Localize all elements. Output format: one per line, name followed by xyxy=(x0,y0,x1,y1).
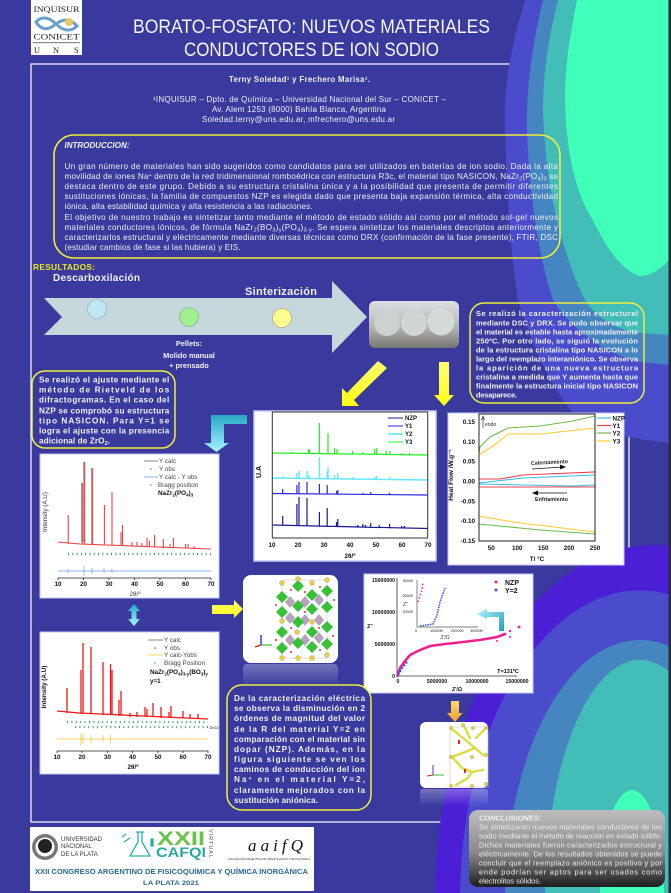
logo: flask xyxy=(122,832,153,856)
panel: introduccion: + xyxy=(149,173,152,179)
curve: Y3 xyxy=(272,423,428,455)
difference curve xyxy=(57,733,208,745)
legend: Y calc-Yobs xyxy=(164,652,197,659)
logo: INQUISUR CONICET UNS: CONICET xyxy=(34,32,80,42)
legend: Y1 xyxy=(612,423,621,430)
panel: introduccion: sustituciones iónicas, la familia de compuestos NZP es elegida dado que presenta baja expansión térmica, alta conductividad xyxy=(64,192,558,201)
axis labels: 2θ/º xyxy=(345,553,356,560)
panel: introduccion: Un gran número de materiales han sido sugeridos como candidatos para ser utilizados en baterías de ion sodio. Dada la alta xyxy=(64,162,558,171)
logo: XXII CAFQI: VIRTUAL xyxy=(207,829,213,858)
legend: Bragg Position xyxy=(164,660,205,667)
panel: introduccion: ) xyxy=(300,223,303,232)
panel: introduccion: movilidad de iones Na xyxy=(64,172,148,181)
text box: rietveld: Se realizó el ajuste mediante el xyxy=(39,376,169,384)
panel: introduccion: destaca dentro de este grupo. Debido a su estructura cristalina única y a la posibilidad que presenta de permitir diferentes xyxy=(64,182,558,191)
logo: XXII CAFQI: CAFQI xyxy=(156,844,206,860)
decorative ellipses bottom right xyxy=(435,545,671,893)
panel: introduccion: 4 xyxy=(297,228,300,234)
text box: electrica: se observa la disminución en 2 xyxy=(234,704,365,713)
axis labels: 60 xyxy=(398,542,406,549)
text box: rietveld: NZP se comprobó su estructura xyxy=(39,406,170,416)
label: descarboxilacion: Descarboxilación xyxy=(53,273,140,284)
text box: electrica: Na xyxy=(234,775,246,784)
text box: dsc drx: la aparición de una nueva estructura xyxy=(476,364,639,372)
axis labels: 50 xyxy=(156,581,164,588)
legend: Y1 xyxy=(405,424,413,430)
legend: y=1 xyxy=(150,678,161,685)
panel: introduccion: caracterizarlos estructural y eléctricamente mediante diversas técnicas como DRX (confirmación de la fase presente), FTIR, DSC xyxy=(64,233,558,242)
NZP main curve xyxy=(398,634,505,676)
arrow: cyan double vertical xyxy=(128,604,140,626)
inset chart: 200000 xyxy=(451,629,464,633)
arrow: yellow diagonal xyxy=(342,361,387,406)
arrow: cyan elbow xyxy=(204,415,247,452)
legend: 3-y xyxy=(183,672,190,676)
x axis labels: 10000000 xyxy=(465,679,489,685)
chart: rietveld NZP xyxy=(40,454,219,598)
legend xyxy=(494,580,519,675)
inset chart: 100000 xyxy=(430,629,443,633)
axis labels: U.A xyxy=(256,466,263,478)
x axis labels xyxy=(367,624,529,693)
footer logos panel xyxy=(30,827,314,891)
y axis labels: 15000000 xyxy=(372,578,395,584)
x tick labels: T/ °C xyxy=(530,555,545,563)
x axis labels: 15000000 xyxy=(505,679,529,685)
affiliation xyxy=(153,95,447,124)
y tick labels: 0.10 xyxy=(463,439,475,446)
text box: electrica xyxy=(227,685,371,810)
legend: Y obs xyxy=(164,645,180,652)
y tick labels: -0.10 xyxy=(461,518,475,525)
text box: dsc drx: largo del reemplazo interaniónico. Se observa xyxy=(476,354,639,364)
legend: 3 xyxy=(201,672,204,676)
heading: resultados: RESULTADOS: xyxy=(33,262,95,272)
curve: Y1 xyxy=(272,482,428,495)
annotations: endo xyxy=(485,422,496,428)
legend: Bragg position xyxy=(158,482,199,489)
x tick labels: 150 xyxy=(538,545,549,552)
panel: introduccion: 4 xyxy=(537,176,540,182)
x tick labels: 200 xyxy=(564,545,575,552)
y tick labels: 0.15 xyxy=(463,419,475,426)
x tick labels: 50 xyxy=(488,545,495,552)
crystal structure 2 xyxy=(420,722,488,806)
inset chart: Z'' xyxy=(403,602,408,608)
panel: introduccion: (PO xyxy=(282,223,297,232)
axis labels: 10 xyxy=(54,581,62,588)
chart: rietveld y=1 xyxy=(40,632,219,774)
panel: conclusiones: concluir que el reemplazo aniónico es positivo y por xyxy=(479,858,663,868)
legend: ) xyxy=(203,669,205,676)
title xyxy=(133,17,490,61)
legend: NaZr xyxy=(158,490,172,497)
curve: Y2 xyxy=(272,457,428,480)
panel: introduccion: 2 xyxy=(519,176,522,182)
annotations xyxy=(482,416,569,503)
x tick labels: 100 xyxy=(512,545,523,552)
legend: Y2 xyxy=(405,432,413,438)
curves: Y2 xyxy=(479,416,595,534)
text box: dsc drx: Se realizó la caracterización estructural xyxy=(476,309,638,318)
legend xyxy=(597,416,625,446)
label: pellets: + prensado xyxy=(169,361,209,370)
x tick labels: 250 xyxy=(590,545,601,552)
legend: 2 xyxy=(172,492,175,498)
text box: dsc drx: de la estructura cristalina tipo NASICON a lo xyxy=(476,346,638,354)
legend: 4 xyxy=(186,492,189,498)
axis labels: 10 xyxy=(53,754,61,761)
text: congress name: LA PLATA 2021 xyxy=(143,880,199,887)
chart: xrd patterns xyxy=(254,411,436,561)
legend: ) xyxy=(181,669,183,676)
inset chart: 300000 xyxy=(470,629,483,633)
chart: heat flow xyxy=(448,413,625,565)
axis labels: 20 xyxy=(80,581,87,588)
text box: electrica: claramente mejorados con la xyxy=(234,786,365,795)
x axis labels: Z'/Ω xyxy=(452,687,462,693)
arrow: yellow right xyxy=(212,600,243,618)
text box: rietveld: método de Rietveld de los xyxy=(39,386,170,394)
text box: dsc drx: mediante DSC y DRX. Se pudo observar que xyxy=(476,318,638,328)
logo: INQUISUR CONICET UNS xyxy=(31,0,82,55)
logo: XXII CAFQI: XXII xyxy=(157,829,205,850)
title: BORATO-FOSFATO: NUEVOS MATERIALES xyxy=(133,17,490,38)
axis labels: 70 xyxy=(207,581,215,588)
label: pellets: Molido manual xyxy=(163,351,215,360)
bragg ticks xyxy=(67,722,208,727)
bragg ticks xyxy=(68,553,211,555)
affiliation: ¹INQUISUR – Dpto. de Química – Universidad Nacional del Sur – CONICET – xyxy=(153,95,447,104)
step: sinterizacion circle xyxy=(272,308,292,328)
panel: introduccion: ) xyxy=(276,223,279,232)
text: UNLP name xyxy=(61,837,103,858)
panel: introduccion: 3 xyxy=(544,176,547,182)
x tick labels: Heat Flow /W.g⁻¹ xyxy=(448,449,455,501)
curves: Y3 xyxy=(479,428,595,532)
legend: T=131ºC xyxy=(497,669,519,675)
inset chart: Z'/Ω xyxy=(440,635,450,641)
curve: NZP xyxy=(272,497,428,528)
legend: ZrO2 xyxy=(210,725,219,730)
panel: conclusiones: CONCLUSIONES: xyxy=(479,814,542,822)
legend: 3 xyxy=(191,492,194,498)
crystal structure 1 xyxy=(243,575,338,686)
affiliation: Soledad.terny@uns.edu.ar, mfrechero@uns.edu.ar xyxy=(202,115,395,124)
text box: rietveld: difractogramas. En el caso del xyxy=(39,396,169,404)
panel: introduccion: 3-y xyxy=(303,228,312,234)
legend xyxy=(148,637,219,730)
axis labels: 30 xyxy=(320,542,328,549)
logo: INQUISUR CONICET UNS: N xyxy=(53,46,59,55)
axis labels: 50 xyxy=(372,542,380,549)
legend: (PO xyxy=(175,490,186,497)
observed curve xyxy=(57,643,208,719)
curves: NZP xyxy=(479,475,595,489)
text box: electrica: en el material Y=2, xyxy=(253,775,365,784)
text box: electrica: dopar (NZP). Además, en la xyxy=(234,745,365,754)
panel: conclusiones: sodio mediante el método de reacción en estado sólido. xyxy=(479,832,662,840)
logo: INQUISUR CONICET UNS: U xyxy=(34,46,40,55)
text box: electrica: órdenes de magnitud del valor xyxy=(234,714,366,723)
axis labels xyxy=(42,492,215,598)
authors: Terny Soledad¹ y Frechero Marisa¹. xyxy=(229,75,370,84)
text box: electrica: de la R del material Y=2 en xyxy=(234,725,365,734)
panel: introduccion: ) xyxy=(541,172,544,181)
panel: introduccion: . Se espera sintetizar los materiales descriptos anteriormente y xyxy=(312,223,559,232)
title: CONDUCTORES DE ION SODIO xyxy=(184,40,439,61)
photo: pellets xyxy=(369,301,459,348)
legend: ) xyxy=(189,490,191,497)
calc curve xyxy=(82,462,92,544)
panel: introduccion: El objetivo de nuestro trabajo es sintetizar tanto mediante el método de estado sólido así como por el método sol-gel nuevos xyxy=(64,213,558,222)
y tick labels xyxy=(461,419,475,545)
axis labels: 40 xyxy=(346,542,354,549)
panel: introduccion: materiales conductores iónicos, de fórmula NaZr xyxy=(64,223,253,232)
inset chart xyxy=(402,579,483,641)
legend: NZP xyxy=(612,416,625,422)
y axis labels: 5000000 xyxy=(375,642,395,648)
content frame xyxy=(31,64,629,822)
text box: dsc drx: finalmente la estructura inicial tipo NASICON xyxy=(476,382,638,390)
axis labels: 40 xyxy=(129,754,136,761)
text: UNLP name: NACIONAL xyxy=(61,844,92,850)
text box: dsc drx: 250ºC. Por otro lado, se siguió la evolución xyxy=(476,336,638,346)
axis labels: 20 xyxy=(294,542,302,549)
axis labels xyxy=(256,466,432,560)
NZP outlier points xyxy=(496,626,520,642)
logo: aaifQ: ASOCIACION ARGENTINA DE INVESTIGACION FISICOQUIMICA xyxy=(228,857,310,861)
text box: dsc drx: cristalina a medida que Y aumenta hasta que xyxy=(476,372,638,382)
text box: rietveld: logra el ajuste con la presencia xyxy=(39,426,170,436)
legend: 4 xyxy=(178,672,181,676)
text box: electrica: comparación con el material sin xyxy=(234,735,365,744)
y axis labels xyxy=(372,578,395,680)
x tick labels xyxy=(448,449,601,563)
annotations: Enfriamiento xyxy=(535,497,569,503)
inset chart: 0 xyxy=(415,629,417,633)
text box: electrica: De la caracterización eléctrica xyxy=(234,694,365,703)
panel: introduccion: (estudiar cambios de fase si las hubiera) y EIS. xyxy=(64,243,240,252)
panel: introduccion: (BO xyxy=(257,223,272,232)
legend: 2 xyxy=(164,672,167,676)
legend: NaZr xyxy=(150,669,164,676)
panel: introduccion: dentro de la red tridimensional romboédrica con estructura R3c, el material tipo NASICON, NaZr xyxy=(152,172,519,181)
legend: (PO xyxy=(167,669,178,676)
panel: introduccion: y xyxy=(279,228,282,234)
panel: conclusiones: eléctricamente. De los resultados obtenidos se puede xyxy=(479,850,662,858)
legend: Y calc xyxy=(164,637,181,644)
y axis labels: 0 xyxy=(392,674,395,680)
logo: INQUISUR CONICET UNS: INQUISUR xyxy=(34,4,80,14)
y tick labels: 0.05 xyxy=(463,458,475,466)
panel: introduccion: 3 xyxy=(272,228,275,234)
arrow: orange down xyxy=(447,701,462,722)
curves: Y1 xyxy=(479,472,595,487)
text box: electrica: caminos de conducción del ion xyxy=(234,765,365,774)
text box: rietveld: 2 xyxy=(105,441,108,447)
axis labels: 2θ/º xyxy=(129,591,141,598)
text: UNLP name: DE LA PLATA xyxy=(61,852,98,858)
text: congress name xyxy=(35,867,309,887)
axis labels: Intensity (A.U) xyxy=(41,666,48,708)
process arrow xyxy=(44,281,367,353)
arrow: cyan elbow inside chart xyxy=(477,609,504,631)
text box: electrica: figura siguiente se ven los xyxy=(234,755,365,764)
text box: electrica: + xyxy=(248,776,251,782)
axis labels: 70 xyxy=(424,542,432,549)
panel: conclusiones: Dichos materiales fueron caracterizados estructural y xyxy=(479,840,662,850)
text box: dsc drx: el material es estable hasta aproximadamente xyxy=(476,328,638,336)
Y=2 main points xyxy=(398,662,407,675)
y tick labels: -0.05 xyxy=(461,498,475,506)
text box: rietveld: tipo NASICON. Para Y=1 se xyxy=(39,416,170,426)
panel: conclusiones: ende podrían ser aptos para ser usados como xyxy=(479,868,662,876)
axis labels: 30 xyxy=(104,754,111,761)
axis labels: 10 xyxy=(268,542,276,549)
axis labels: 20 xyxy=(78,754,86,761)
inset chart: 30000 xyxy=(402,579,413,583)
legend: Y=2 xyxy=(505,588,518,595)
step: pellets circle xyxy=(180,308,198,326)
panel: conclusiones: Se sintetizaron nuevos materiales conductores de ion xyxy=(479,822,662,832)
chart: impedance nyquist xyxy=(364,574,533,693)
difference curve xyxy=(58,566,211,576)
axis labels: 30 xyxy=(105,581,113,588)
x axis labels: 0 xyxy=(397,679,400,685)
legend: Y obs xyxy=(159,466,175,473)
legend xyxy=(388,416,417,446)
inset chart: 20000 xyxy=(402,594,413,598)
panel: conclusiones: electrolitos sólidos. xyxy=(479,876,541,886)
legend: Y3 xyxy=(612,438,621,446)
y tick labels: -0.15 xyxy=(461,538,475,545)
legend: Y2 xyxy=(612,430,621,438)
legend: NZP xyxy=(505,580,519,587)
panel: introduccion: INTRODUCCION: xyxy=(64,141,130,150)
axis labels: 40 xyxy=(131,581,138,588)
text box: electrica: sustitución aniónica. xyxy=(234,796,318,805)
x axis labels: 5000000 xyxy=(427,679,447,685)
panel: introduccion: (PO xyxy=(522,172,537,181)
label: sinterizacion: Sinterización xyxy=(245,286,317,298)
legend: Y calc - Y obs xyxy=(159,474,198,481)
axis labels: 70 xyxy=(204,754,212,761)
y tick labels: 0.00 xyxy=(463,478,475,486)
logo: aaifQ xyxy=(228,836,310,861)
text: UNLP name: UNIVERSIDAD xyxy=(61,837,103,843)
inset chart: 10000 xyxy=(402,610,413,614)
legend: NZP xyxy=(405,416,417,422)
axis labels: 60 xyxy=(179,754,187,761)
logo: UNLP seal xyxy=(32,834,58,860)
text box: dsc drx: desaparece. xyxy=(476,390,517,400)
text box: rietveld: . xyxy=(108,436,110,446)
y axis labels: 10000000 xyxy=(372,610,395,616)
axis labels: 60 xyxy=(182,581,189,588)
legend: Y3 xyxy=(405,440,413,446)
panel: introduccion: 2 xyxy=(254,228,257,234)
panel: introduccion: se xyxy=(547,172,558,181)
logo: INQUISUR CONICET UNS: S xyxy=(74,46,79,55)
affiliation: Av. Alem 1253 (8000) Bahía Blanca, Argentina xyxy=(212,105,387,114)
legend: y xyxy=(205,672,208,676)
panel: introduccion xyxy=(54,135,560,258)
label: pellets xyxy=(163,339,215,370)
axis labels: Intensity (A.U) xyxy=(42,492,49,532)
observed curve xyxy=(58,462,211,549)
arrow: yellow down xyxy=(434,362,454,406)
legend: Y calc xyxy=(159,458,176,465)
axis labels: 50 xyxy=(154,754,162,761)
panel: introduccion: iónica, alta estabilidad química y alta resistencia a las radiaciones. xyxy=(64,202,312,211)
legend: (BO xyxy=(189,669,201,676)
axis labels xyxy=(41,666,212,771)
label: pellets: Pellets: xyxy=(176,339,202,348)
axis labels: 2θ/º xyxy=(128,764,139,771)
text box: dsc drx xyxy=(470,303,644,403)
annotations: Calentamiento xyxy=(531,459,569,467)
panel: conclusiones xyxy=(469,810,665,887)
x axis labels: Z'' xyxy=(367,624,373,630)
text: congress name: XXII CONGRESO ARGENTINO DE FISICOQUÍMICA Y QUÍMICA INORGÁNICA xyxy=(35,867,309,876)
logo: aaifQ: aaifQ xyxy=(248,836,303,855)
legend xyxy=(144,458,199,498)
text box: rietveld xyxy=(32,371,175,448)
step: descarboxilacion circle xyxy=(88,300,106,318)
right edge strip xyxy=(668,0,671,893)
decorative ellipses top right xyxy=(505,0,671,443)
text box: rietveld: adicional de ZrO xyxy=(39,436,104,446)
logo: XXII CAFQI xyxy=(156,829,213,860)
